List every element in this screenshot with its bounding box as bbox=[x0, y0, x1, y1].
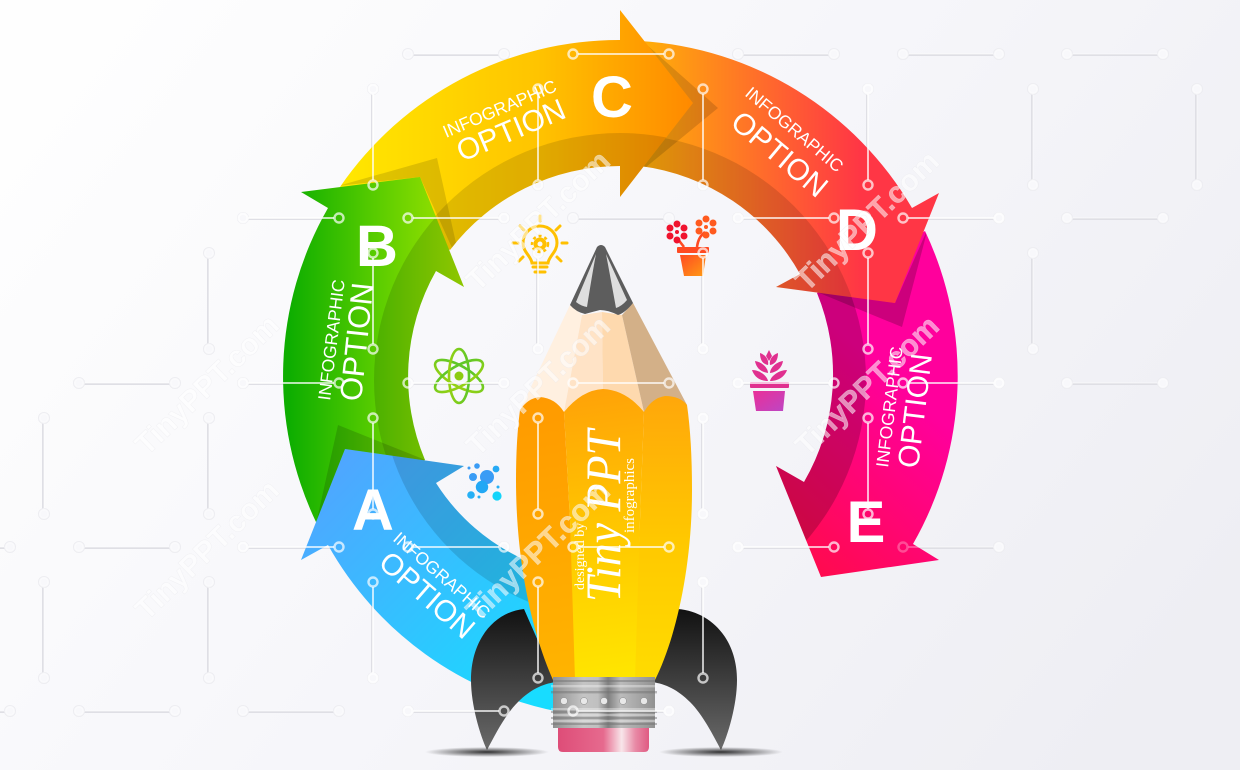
label D: OPTION bbox=[725, 105, 834, 204]
label E: INFOGRAPHIC bbox=[872, 345, 907, 468]
label B bbox=[314, 278, 380, 403]
icon: bubbles bbox=[467, 463, 502, 501]
arrow B: green bbox=[283, 177, 464, 522]
rocket fin: right bbox=[652, 609, 737, 750]
watermarks: TinyPPT.com bbox=[129, 309, 286, 462]
pencil branding text: designed by bbox=[573, 523, 588, 590]
letter E: E bbox=[847, 490, 885, 555]
barrel right facet bbox=[633, 396, 692, 680]
label D: INFOGRAPHIC bbox=[741, 83, 847, 176]
pencil lead bbox=[570, 245, 633, 315]
fin ground shadow: right bbox=[659, 747, 783, 757]
watermarks: TinyPPT.com bbox=[789, 310, 946, 463]
fin ground shadow: left bbox=[425, 747, 549, 757]
watermarks: TinyPPT.com bbox=[460, 475, 617, 628]
rocket fin: left bbox=[471, 609, 556, 750]
sharpened wood cone bbox=[520, 303, 687, 412]
watermarks: TinyPPT.com bbox=[460, 310, 617, 463]
icon: light bulb with gear bbox=[513, 216, 567, 272]
label E bbox=[872, 345, 939, 470]
icon: succulent pot bbox=[750, 350, 789, 411]
label C: OPTION bbox=[452, 93, 571, 168]
watermarks: TinyPPT.com bbox=[789, 145, 946, 298]
watermarks bbox=[129, 145, 946, 628]
metal ferrule bbox=[551, 677, 657, 728]
label B: INFOGRAPHIC bbox=[314, 278, 349, 401]
eraser bbox=[558, 728, 649, 752]
label C: INFOGRAPHIC bbox=[440, 76, 559, 142]
arrow A: blue bbox=[301, 449, 553, 710]
letter B: B bbox=[356, 214, 398, 279]
label A: OPTION bbox=[372, 545, 481, 646]
letter C: C bbox=[591, 65, 633, 130]
icon: atom bbox=[431, 349, 487, 403]
pencil branding text: Tiny PPT bbox=[575, 427, 631, 602]
icon: flower pot bbox=[666, 216, 716, 276]
label A: INFOGRAPHIC bbox=[389, 528, 494, 623]
arrow C: yellow to orange bbox=[340, 10, 693, 250]
pencil branding text: infographics bbox=[622, 458, 638, 533]
barrel left facet bbox=[516, 397, 577, 680]
arrow D: orange to red bbox=[644, 41, 939, 303]
watermarks: TinyPPT.com bbox=[460, 145, 617, 298]
barrel middle facet bbox=[564, 389, 644, 680]
letter A: A bbox=[352, 478, 394, 543]
pencil bbox=[516, 245, 692, 752]
arrow E: magenta bbox=[776, 231, 958, 577]
label E: OPTION bbox=[892, 352, 939, 470]
watermarks: TinyPPT.com bbox=[129, 474, 286, 627]
label B: OPTION bbox=[333, 281, 380, 403]
letter D: D bbox=[836, 198, 878, 263]
